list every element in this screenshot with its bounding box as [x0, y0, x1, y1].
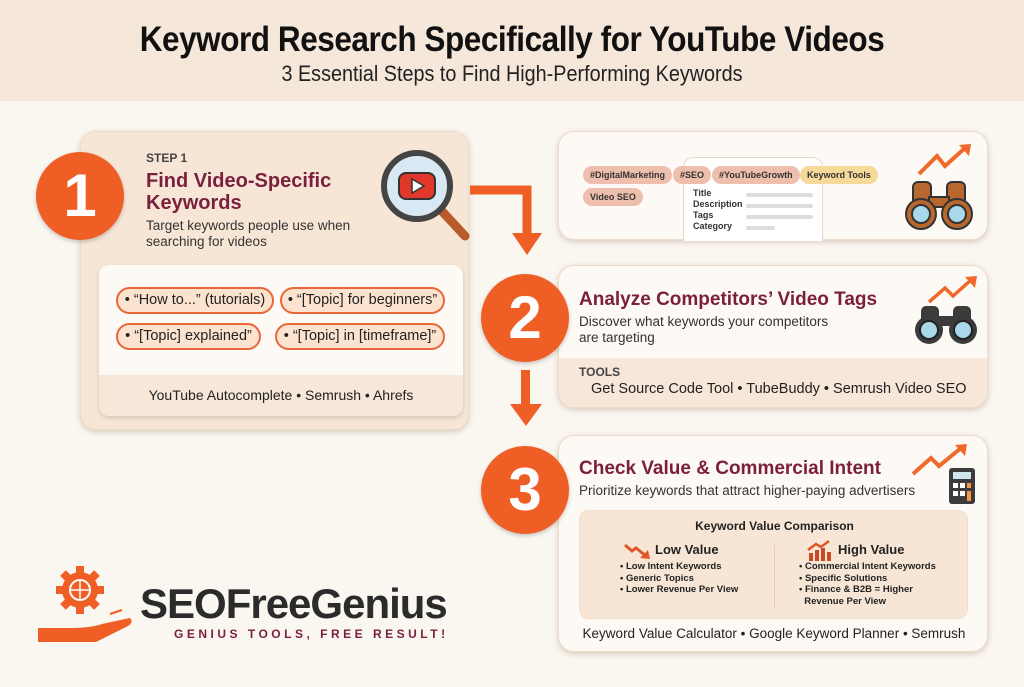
chip: timeframe: • “[Topic] in [timeframe]” — [284, 328, 436, 344]
tools strip: YouTube Autocomplete • Semrush • Ahrefs — [149, 387, 413, 403]
step number 2: 2 — [508, 284, 542, 351]
hashtag chips: Keyword Tools — [807, 170, 871, 180]
step 1 description — [146, 218, 350, 249]
icon: calculator with trend — [912, 444, 975, 504]
column: high value: High Value — [838, 542, 904, 557]
step 1 heading — [146, 170, 331, 214]
comparison box — [579, 510, 968, 619]
header band — [0, 0, 1024, 101]
tagline: GENIUS TOOLS, FREE RESULT! — [174, 627, 449, 641]
column: high value — [799, 540, 936, 606]
step number 1: 1 — [63, 162, 97, 229]
comparison title: Keyword Value Comparison — [695, 519, 854, 533]
hashtag chips: #YouTubeGrowth — [719, 170, 793, 180]
hashtag chips: Video SEO — [590, 192, 636, 202]
chip: timeframe — [275, 323, 445, 350]
column: low value — [620, 542, 738, 595]
metadata card: Category — [693, 221, 732, 231]
panel: tags illustration — [558, 131, 988, 240]
chip: how to: • “How to...” (tutorials) — [125, 292, 265, 308]
panel: step 3 — [558, 435, 988, 652]
metadata card: Tags — [693, 210, 713, 220]
step number 2 — [481, 274, 569, 362]
tools line: Keyword Value Calculator • Google Keyword Planner • Semrush — [583, 626, 965, 641]
metadata card: Title — [693, 188, 711, 198]
step 1 heading: Keywords — [146, 192, 242, 214]
column: high value: • Specific Solutions — [799, 572, 887, 584]
metadata card: Description — [693, 199, 743, 209]
hashtag chips — [583, 166, 878, 206]
chip: for beginners — [280, 287, 445, 314]
divider — [774, 545, 775, 609]
brand name: SEOFreeGenius — [140, 580, 447, 627]
icon: magnifier youtube — [381, 150, 470, 240]
step 1 heading: Find Video-Specific — [146, 170, 331, 192]
hashtag chips: #DigitalMarketing — [590, 170, 665, 180]
chip: explained — [116, 323, 261, 350]
column: low value: Low Value — [655, 542, 719, 557]
step 2 description: Discover what keywords your competitors — [579, 314, 828, 329]
step label: STEP 1 — [146, 151, 187, 165]
panel: step 1 — [80, 131, 469, 430]
step 1 description: searching for videos — [146, 234, 267, 249]
icon: gear globe hand — [38, 566, 132, 642]
tools strip — [559, 358, 989, 409]
chip: how to — [116, 287, 274, 314]
icon: binoculars with trend — [905, 144, 973, 230]
step 2 description — [579, 314, 828, 345]
subtitle: 3 Essential Steps to Find High-Performing Keywords — [281, 61, 743, 86]
column: high value: Revenue Per View — [804, 596, 886, 606]
tools strip — [99, 375, 463, 416]
step number 3: 3 — [508, 456, 542, 523]
hashtag chips: #SEO — [680, 170, 704, 180]
step 2 description: are targeting — [579, 330, 655, 345]
title: Keyword Research Specifically for YouTube Videos — [140, 20, 884, 59]
panel: step 2 — [558, 265, 988, 408]
column: low value: • Lower Revenue Per View — [620, 584, 738, 595]
icon: dark binoculars — [915, 276, 977, 344]
arrow: step1 to step2 — [470, 186, 542, 255]
arrow: step2 to step3 — [510, 370, 542, 426]
step 1 description: Target keywords people use when — [146, 218, 350, 233]
step 2 heading: Analyze Competitors’ Video Tags — [579, 289, 877, 310]
logo — [38, 566, 449, 642]
tools strip: TOOLS — [579, 365, 620, 379]
metadata card — [683, 157, 823, 241]
inner keyword examples box — [99, 265, 463, 416]
column: low value: • Generic Topics — [620, 572, 694, 584]
column: high value: • Commercial Intent Keywords — [799, 561, 936, 572]
column: high value: • Finance & B2B = Higher — [799, 584, 913, 595]
step 3 heading: Check Value & Commercial Intent — [579, 458, 881, 479]
column: low value: • Low Intent Keywords — [620, 561, 722, 572]
tools strip: Get Source Code Tool • TubeBuddy • Semrush Video SEO — [591, 381, 967, 397]
step 3 description: Prioritize keywords that attract higher-paying advertisers — [579, 483, 915, 498]
chip: for beginners: • “[Topic] for beginners” — [288, 292, 437, 308]
chip: explained: • “[Topic] explained” — [125, 328, 252, 344]
step number 1 — [36, 152, 124, 240]
step number 3 — [481, 446, 569, 534]
